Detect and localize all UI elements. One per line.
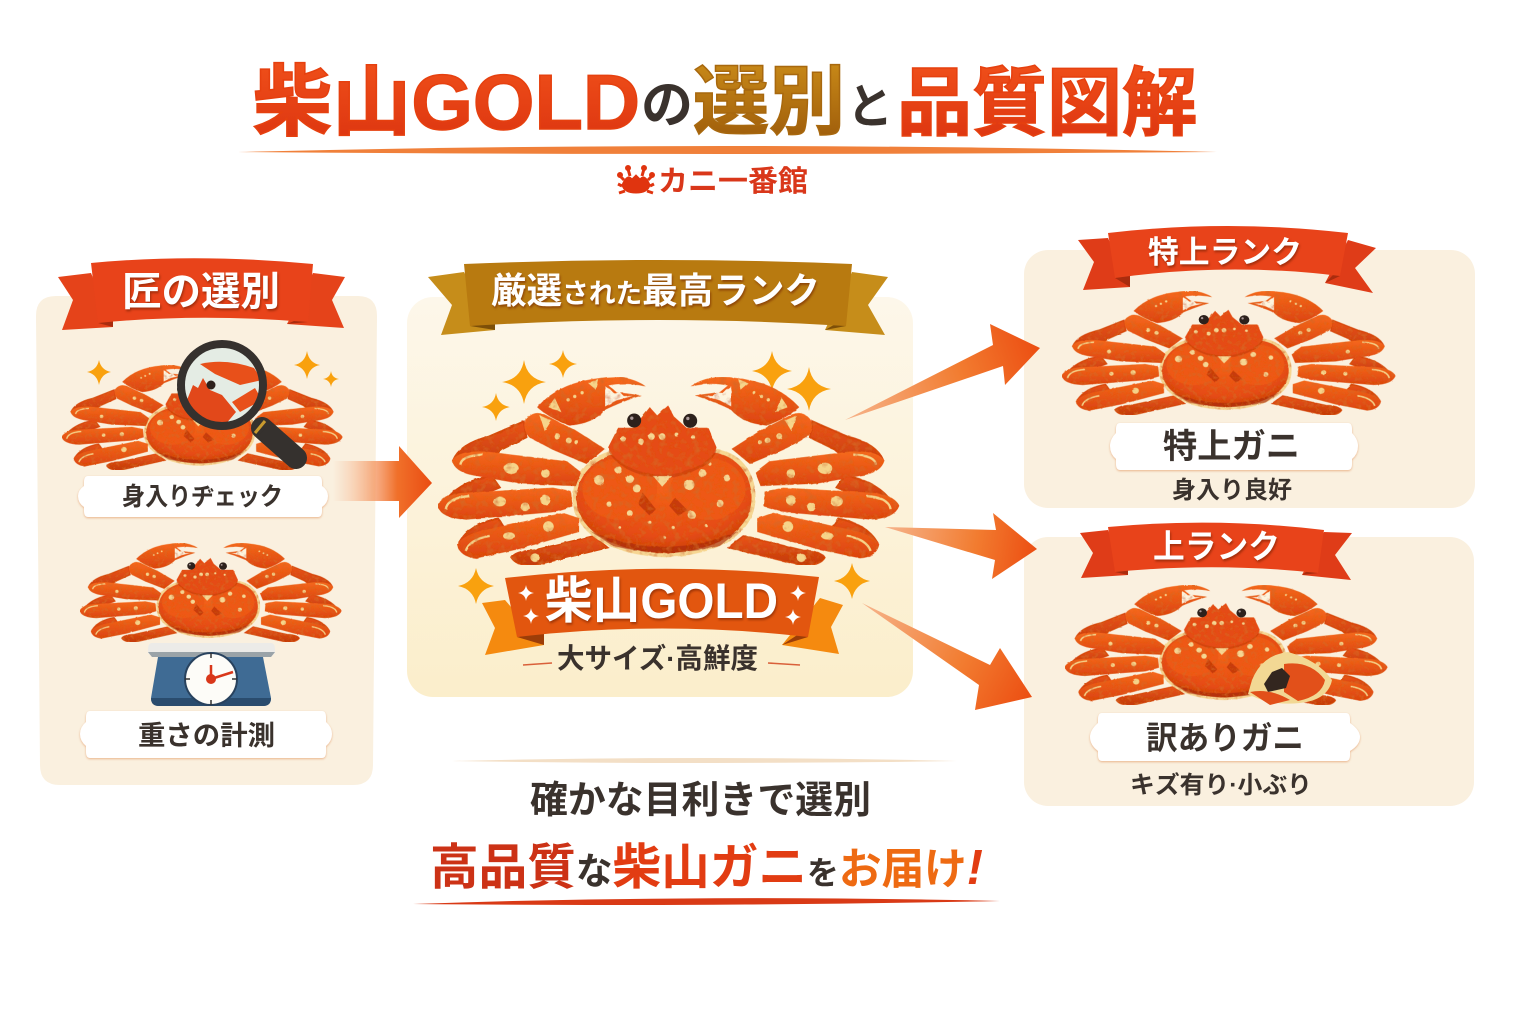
caption: good meat: 身入り良好 [1172, 477, 1292, 504]
message line 1: 確かな目利きで選別 [530, 780, 871, 822]
arrow: to special rank [845, 324, 1040, 420]
title: の [641, 77, 693, 135]
caption: scratches small: キズ有り·小ぶり [1130, 771, 1312, 799]
banner: Shibayama GOLD: 柴山GOLD [545, 573, 778, 629]
damaged shell [1248, 652, 1332, 705]
ribbon: craftsman selection: 匠の選別 [122, 270, 280, 314]
crab [1061, 291, 1396, 415]
icon: brand crab [618, 166, 654, 193]
brand name: カニ一番館 [658, 165, 808, 198]
message line 2: 高品質な柴山ガニをお届け! [430, 841, 983, 895]
title [253, 58, 1197, 146]
title underline [238, 146, 1217, 154]
label: weight measuring: 重さの計測 [138, 721, 275, 751]
main crab [437, 377, 899, 565]
panel: upper rank [1024, 523, 1474, 806]
panel: craftsman selection [36, 258, 377, 785]
panel: highest rank [407, 260, 913, 697]
icon: magnifier [181, 344, 296, 458]
panel: special rank [1024, 226, 1475, 508]
arrow: to top rank [333, 446, 432, 518]
ribbon: special rank [1078, 226, 1376, 293]
label: bargain crab: 訳ありガニ [1146, 720, 1304, 756]
label: bargain crab [1090, 713, 1360, 761]
label: weight measuring [80, 711, 332, 758]
sparkles [518, 585, 806, 625]
title: と [847, 81, 893, 134]
ribbon: highest rank [428, 260, 888, 335]
brand logo [618, 165, 808, 198]
banner: Shibayama GOLD [482, 569, 843, 655]
ribbon: craftsman selection [58, 258, 345, 330]
sparkles [458, 350, 870, 604]
crab [1064, 585, 1388, 705]
sparkles [87, 351, 339, 387]
title: 選別 [693, 60, 845, 145]
label: special crab [1110, 423, 1358, 470]
label: meat check: 身入りヂェック [122, 483, 283, 511]
ribbon: upper rank [1080, 523, 1352, 580]
caption: large size high freshness: 大サイズ·高鮮度 [557, 642, 758, 674]
title: 品質図解 [897, 61, 1197, 145]
crab on scale [79, 543, 342, 642]
closing message [413, 758, 1000, 905]
icon: weighing scale [148, 643, 275, 706]
label: meat check [78, 476, 328, 517]
arrow: to upper rank [885, 513, 1037, 579]
ribbon: upper rank: 上ランク [1153, 528, 1280, 565]
title: 柴山GOLD [253, 58, 640, 146]
crab under magnifier [61, 365, 343, 470]
ribbon: highest rank: 厳選された最高ランク [491, 270, 820, 311]
ribbon: special rank: 特上ランク [1148, 235, 1302, 270]
arrow: to bargain crab [862, 603, 1032, 710]
label: special crab: 特上ガニ [1163, 428, 1300, 466]
